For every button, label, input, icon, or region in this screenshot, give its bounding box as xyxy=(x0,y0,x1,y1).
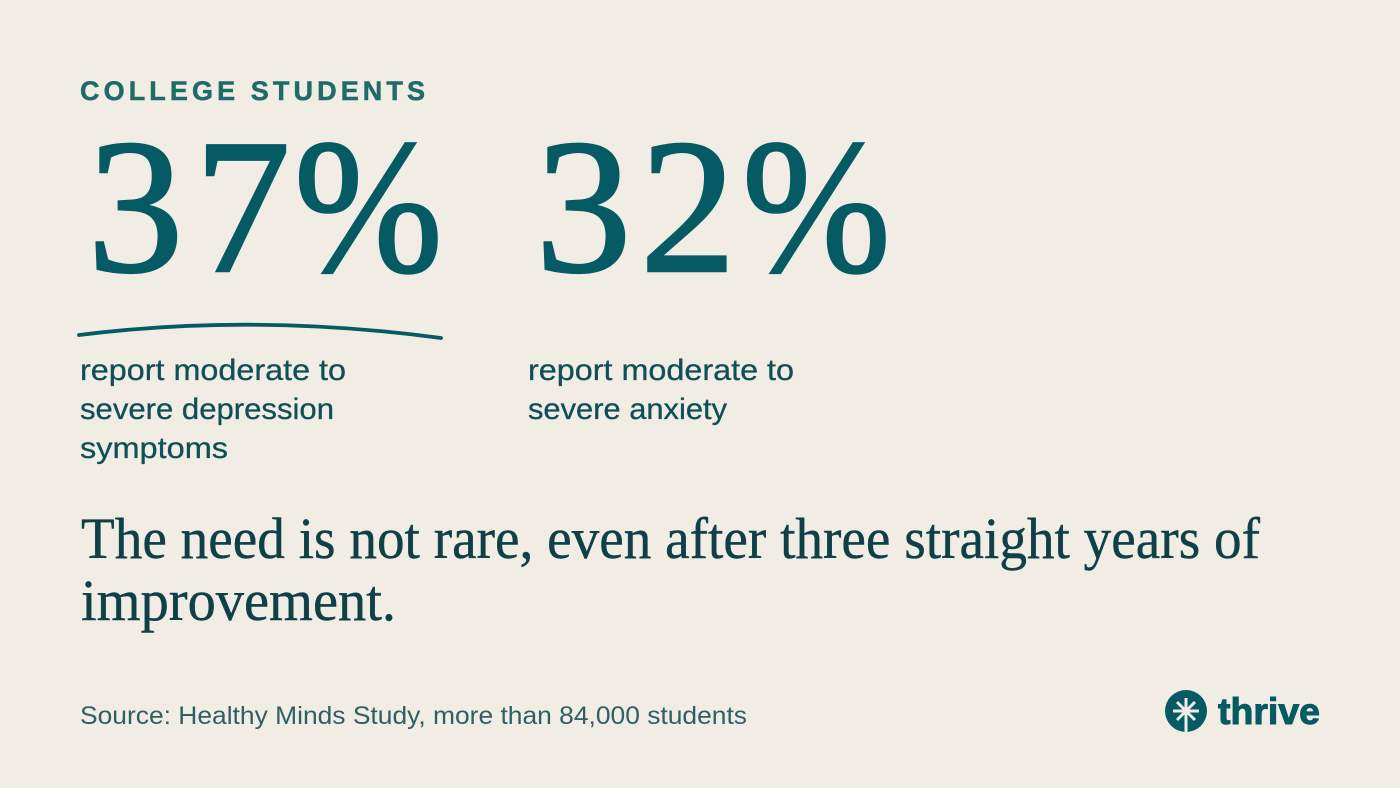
description: anxiety: severe anxiety xyxy=(528,393,727,426)
description: depression: severe depression xyxy=(80,393,334,426)
stat: 32 percent: 2 xyxy=(640,100,736,313)
source note: Source: Healthy Minds Study, more than 84,000 students xyxy=(80,702,747,730)
logo: thrive xyxy=(1165,690,1320,732)
description: anxiety: report moderate to xyxy=(528,354,794,387)
stat: 37 percent: 7 xyxy=(194,100,290,313)
description: anxiety xyxy=(528,354,794,426)
stat: 32 percent: 3 xyxy=(536,100,632,313)
description: depression xyxy=(80,354,346,465)
stat: 32 percent xyxy=(536,100,891,313)
stat: 37 percent xyxy=(88,100,443,313)
takeaway statement: The need is not rare, even after three straight years of xyxy=(81,506,1261,571)
stat: 32 percent: % xyxy=(742,101,891,313)
stat: 37 percent: % xyxy=(294,101,443,313)
stat: 37 percent: 3 xyxy=(88,100,184,313)
takeaway statement xyxy=(81,506,1261,633)
description: depression: report moderate to xyxy=(80,354,346,387)
wordmark: thrive xyxy=(1218,691,1320,732)
icon: starburst circle xyxy=(1165,690,1207,732)
takeaway statement: improvement. xyxy=(81,568,396,633)
description: depression: symptoms xyxy=(80,432,228,465)
eyebrow heading: college students: COLLEGE STUDENTS xyxy=(80,76,425,106)
hand-drawn underline xyxy=(79,325,441,338)
